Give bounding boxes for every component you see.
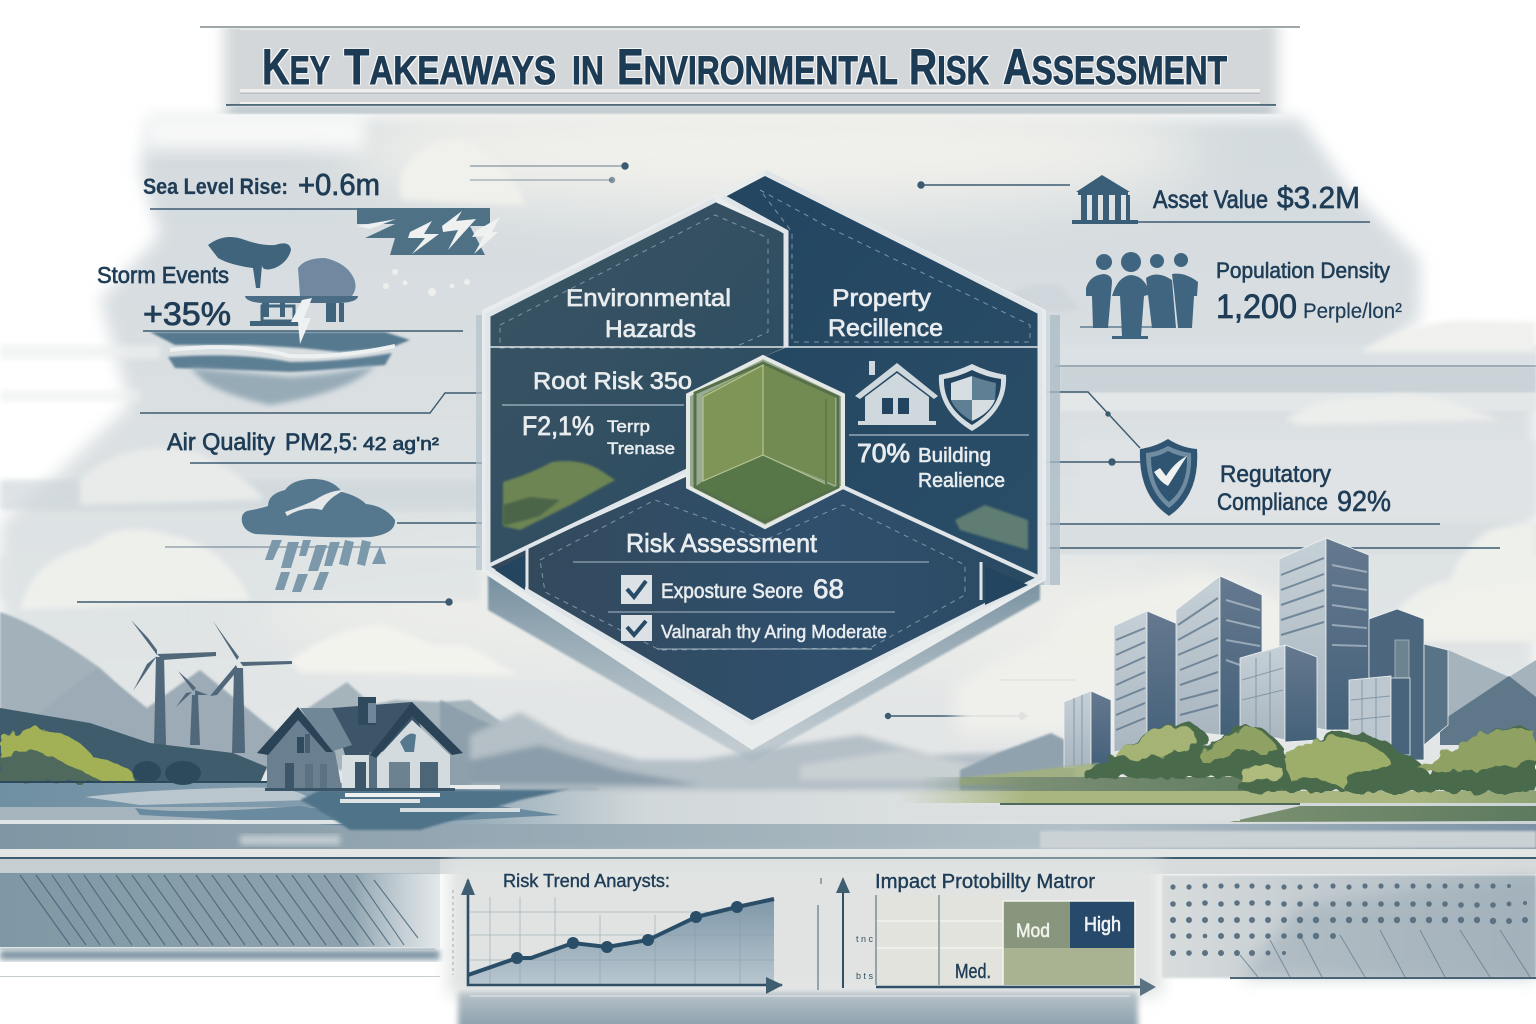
title: ASSESSMENT (1003, 39, 1227, 95)
tower block two (1114, 611, 1180, 752)
asset value label (1153, 180, 1360, 215)
icon: people group (1080, 252, 1198, 339)
title: TAKEAWAYS (344, 39, 556, 95)
air quality label: PM2,5: (285, 429, 358, 456)
population density label: Population Density (1216, 258, 1390, 283)
icon: quartered shield (939, 364, 1006, 431)
panel: risk assessment (488, 476, 1040, 722)
sea level rise label: Sea Level Rise: (143, 174, 288, 199)
regulatory compliance label: 92% (1337, 486, 1391, 518)
population density label: 1,200 (1216, 288, 1297, 326)
stat: temperature increase: Terrp (607, 417, 650, 436)
tower block three (1176, 576, 1262, 735)
axis labels (856, 934, 874, 981)
title banner (200, 26, 1300, 114)
asset value label: $3.2M (1277, 180, 1360, 215)
tower block mid (1240, 645, 1317, 742)
icon: compliance shield (1140, 439, 1197, 516)
stat: temperature increase: F2,1% (522, 411, 594, 441)
bottom hatch band (0, 873, 453, 977)
icon: storm over coastal structure (150, 237, 410, 405)
chart backdrop (448, 860, 1162, 1024)
checkbox row: exposure score: 68 (813, 574, 844, 604)
sea level rise label: +0.6m (298, 167, 380, 202)
panel heading: property: Property (832, 285, 931, 312)
regulatory compliance label: Regutatory (1220, 461, 1331, 488)
cell label: mod: Mod (1016, 921, 1050, 942)
tower block small (1064, 691, 1111, 768)
clouds background (20, 140, 1536, 675)
panel heading: environmental hazards (566, 285, 731, 343)
axis labels: tnc (856, 934, 874, 944)
cell label: high: High (1084, 914, 1121, 936)
water and road left (0, 785, 569, 845)
population density label: Perple/lon² (1303, 300, 1402, 323)
air quality label: 42 ag'n² (363, 434, 439, 454)
chart title: Risk Trend Anarysts: (503, 871, 670, 891)
leader lines (77, 163, 1536, 719)
hexagon borders (488, 172, 1040, 723)
checkbox row: exposure score: Exposture Seore (661, 580, 803, 603)
title (262, 39, 1227, 95)
population density label (1216, 258, 1402, 326)
landscape right: mountains (960, 650, 1536, 790)
green centre hexagon (688, 357, 843, 527)
title: ENVIRONMENTAL (617, 39, 898, 95)
landscape centre: mountains (470, 712, 1060, 790)
storm events label (97, 262, 231, 332)
stat: building resilience (857, 438, 1005, 492)
icon: rain cloud (242, 479, 395, 592)
central hexagon (482, 170, 1046, 750)
stat: building resilience: 70% (857, 438, 910, 468)
panel heading: environmental hazards: Environmental (566, 285, 731, 312)
panel: environmental hazards (488, 202, 786, 566)
landscape left: hill and bushes (0, 708, 270, 785)
stat: temperature increase (522, 411, 675, 458)
regulatory compliance label (1217, 461, 1391, 518)
tower block tallest (1279, 538, 1369, 730)
storm events label: +35% (143, 296, 231, 332)
sea level rise label (143, 167, 380, 202)
storm events label: Storm Events (97, 262, 229, 288)
cell label: med: Med. (955, 961, 991, 983)
regulatory compliance label: Compliance (1217, 489, 1328, 516)
small corner triangles (495, 555, 525, 590)
icon: lightning band (357, 208, 500, 296)
stat: building resilience: Building (918, 445, 991, 467)
panel heading: environmental hazards: Hazards (605, 316, 696, 343)
stat: root risk: Root Risk 35o (533, 368, 692, 395)
clouds behind towers (950, 575, 1536, 735)
impact probability matrix (818, 871, 1156, 996)
trees (1085, 723, 1536, 792)
city towers (1064, 538, 1448, 768)
house (257, 697, 463, 791)
icon: classical building (1072, 175, 1138, 224)
risk trend line chart (461, 871, 783, 994)
landscape left: mountains (0, 612, 600, 790)
panel: property resilience (725, 176, 1040, 578)
title: RISK (909, 39, 989, 95)
tower block dark (1369, 609, 1448, 760)
hexagon extrusion shadow (476, 315, 1060, 762)
air quality label: Air Quality (167, 429, 275, 456)
landscape right: lawns (900, 763, 1536, 822)
checkbox row: vulnerability rating: Valnarah thy Aring Moderate (661, 622, 887, 642)
dot grid band (1162, 875, 1536, 979)
icon: house (855, 361, 938, 425)
road bands (0, 831, 1536, 874)
checkbox row: vulnerability rating (621, 615, 887, 642)
axis labels: bts (856, 971, 874, 981)
air quality label (167, 429, 439, 456)
panel heading: risk assessment: Risk Assessment (626, 528, 818, 558)
title: KEY (262, 39, 330, 95)
wind turbines (131, 620, 292, 753)
checkbox row: exposure score (621, 574, 844, 604)
road and shoreline base (0, 783, 1536, 849)
panel heading: property (828, 285, 943, 342)
panel heading: property: Recillence (828, 315, 943, 342)
tower block front (1349, 676, 1410, 755)
stat: building resilience: Realience (918, 470, 1005, 492)
chart title: Impact Protobillty Matror (875, 871, 1095, 893)
stat: temperature increase: Trenase (607, 439, 675, 458)
asset value label: Asset Value (1153, 186, 1268, 214)
title: IN (572, 49, 604, 93)
